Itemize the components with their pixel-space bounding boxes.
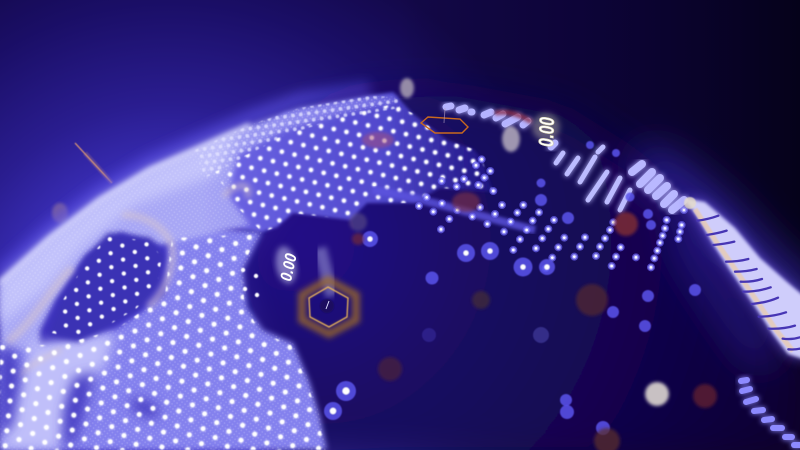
pale band along globe limb xyxy=(0,96,398,350)
land: lower continent xyxy=(0,225,327,450)
lower right limb fragments xyxy=(741,380,800,445)
bokeh lights xyxy=(349,78,717,450)
thick blobs near ring start xyxy=(632,164,684,210)
diagonal dot stripes, upper right xyxy=(556,147,630,210)
bokeh: orange distant marker xyxy=(52,203,68,223)
upper continent dots xyxy=(215,104,493,232)
dark patches in lower-left land xyxy=(0,345,163,450)
dots off coast, mid ocean xyxy=(241,268,259,297)
beige shoreline haze xyxy=(10,186,248,375)
data label 0.00 near upper arc: 0.00 xyxy=(535,117,559,147)
top arc of elongated glowing dots xyxy=(446,106,555,147)
meteor streak xyxy=(75,143,112,183)
land: upper continent xyxy=(205,92,493,232)
white dots on lower continent xyxy=(0,234,325,450)
data label 0.00 near hexagon xyxy=(273,245,301,285)
data label 0.00 near hexagon: 0.00 xyxy=(277,252,301,283)
fine dense dots along limb xyxy=(195,96,400,178)
limb halo on left xyxy=(0,90,370,275)
land: dark inland sea with dots xyxy=(48,233,165,342)
globe sphere: dark ocean xyxy=(220,95,800,450)
hexagon marker: large orange xyxy=(302,248,356,334)
atmospheric glow on right limb xyxy=(640,160,800,360)
right limb ring with ribs xyxy=(684,197,800,360)
hexagon marker: small flat orange xyxy=(421,108,468,133)
lower-left bright coastal mass xyxy=(0,332,115,450)
scattered glowing blue dots xyxy=(324,141,701,435)
blue stripe across ocean xyxy=(372,190,535,230)
right side dots: white with blue halo xyxy=(416,157,687,271)
